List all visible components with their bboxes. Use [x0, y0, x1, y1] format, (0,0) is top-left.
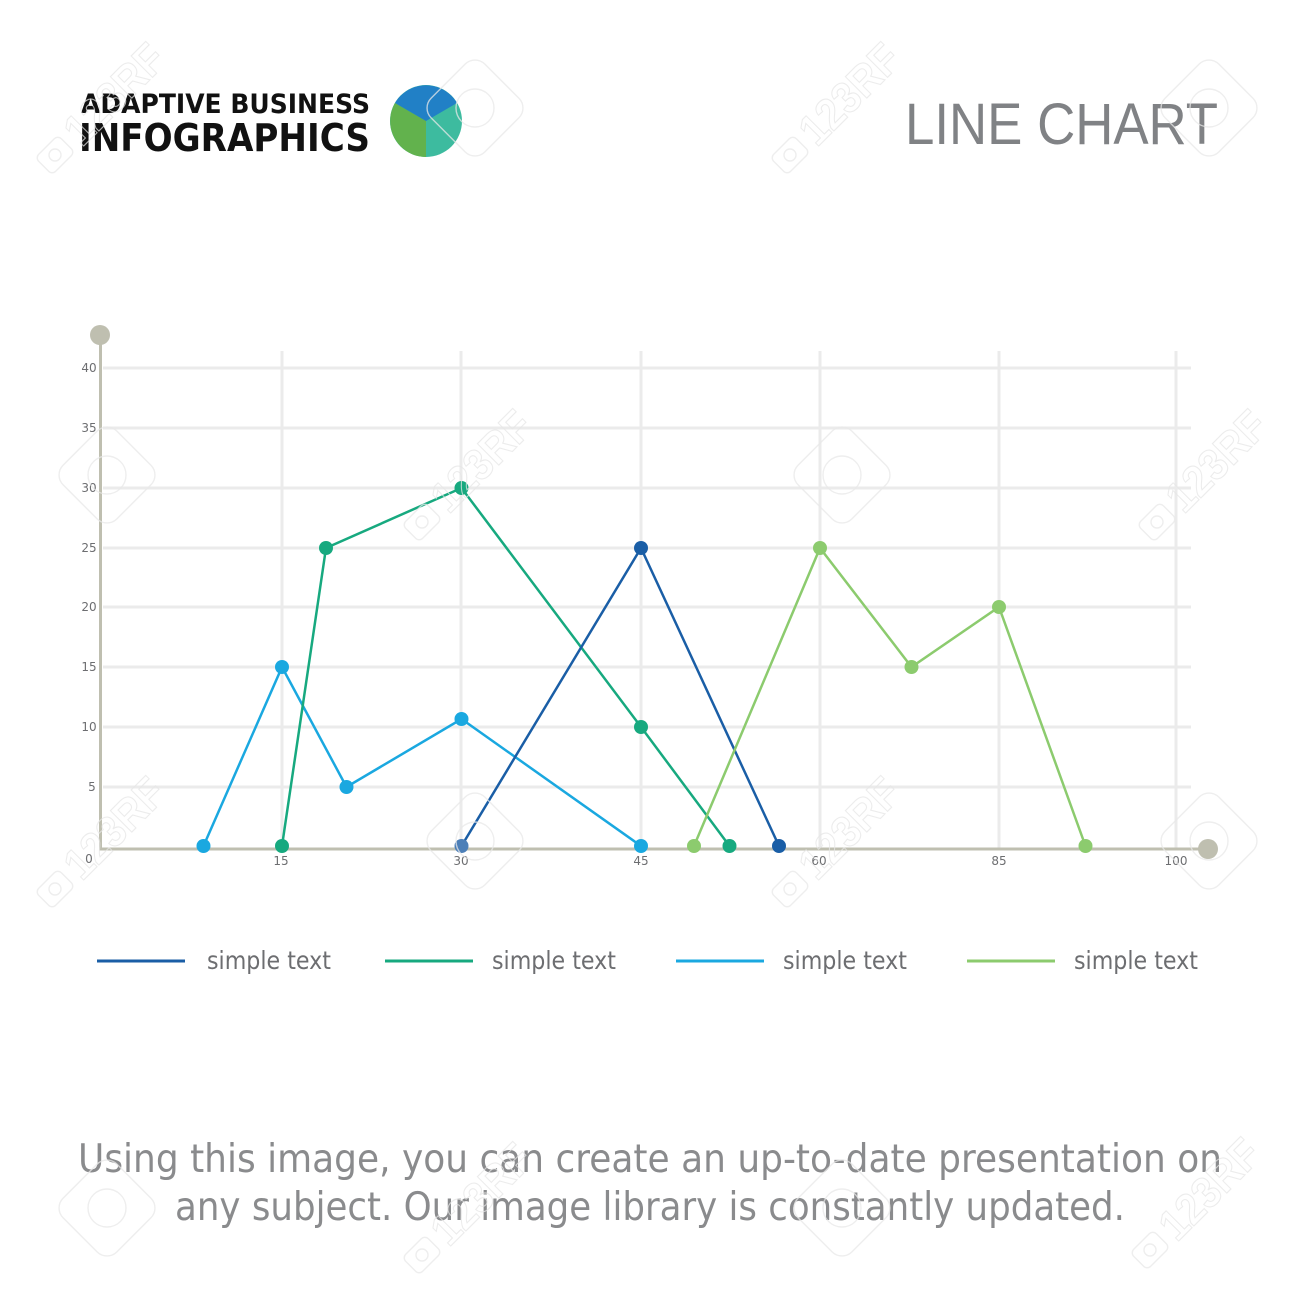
y axis labels: 20	[81, 600, 97, 614]
line chart	[81, 325, 1218, 868]
y axis labels: 0	[85, 852, 93, 866]
footer text: any subject. Our image library is constantly updated.	[175, 1185, 1125, 1230]
x axis labels: 30	[453, 854, 469, 868]
series: light green	[687, 541, 1092, 853]
heading: line chart: LINE CHART	[905, 92, 1218, 157]
legend	[97, 946, 1198, 975]
y axis labels: 5	[88, 780, 96, 794]
logo text: adaptive business: ADAPTIVE BUSINESS	[81, 89, 370, 120]
icon: pie logo	[390, 85, 462, 157]
y axis labels: 25	[81, 541, 97, 555]
legend item 2: simple text	[492, 946, 616, 975]
footer text: Using this image, you can create an up-to-date presentation on	[78, 1137, 1222, 1182]
legend item 3: simple text	[783, 946, 907, 975]
x axis labels	[273, 854, 1187, 868]
axes	[90, 325, 1218, 859]
y axis labels: 35	[81, 421, 97, 435]
x axis labels: 60	[811, 854, 827, 868]
legend item 4: simple text	[1074, 946, 1198, 975]
y axis labels: 15	[81, 660, 97, 674]
legend item 1: simple text	[207, 946, 331, 975]
logo text: infographics: INFOGRAPHICS	[79, 116, 370, 160]
x axis labels: 45	[633, 854, 649, 868]
x axis labels: 85	[991, 854, 1007, 868]
title logo	[79, 85, 462, 160]
grid lines	[103, 351, 1191, 848]
x axis labels: 100	[1165, 854, 1187, 868]
series: dark blue	[454, 541, 786, 853]
series: light blue	[196, 660, 648, 853]
y axis labels: 30	[81, 481, 97, 495]
y axis labels	[81, 361, 97, 866]
y axis labels: 10	[81, 720, 97, 734]
y axis labels: 40	[81, 361, 97, 375]
series: teal green	[275, 481, 736, 853]
footer text	[78, 1137, 1222, 1230]
x axis labels: 15	[273, 854, 289, 868]
